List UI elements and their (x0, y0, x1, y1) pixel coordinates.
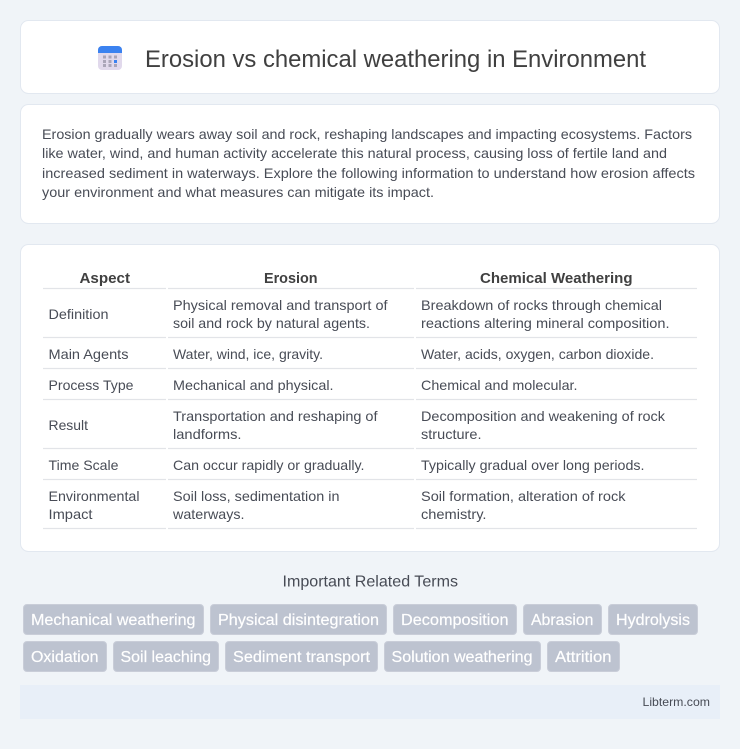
tag: mechanical weathering (24, 604, 204, 634)
table row: environmental impact (43, 488, 697, 528)
table row: environmental impact: Environmental (48, 488, 140, 504)
tag: solution weathering: Solution weathering (392, 649, 532, 666)
table row: result: Transportation and reshaping of (173, 408, 378, 424)
table row: process type: Process Type (48, 377, 134, 393)
tag: hydrolysis: Hydrolysis (616, 612, 690, 629)
table row: time scale: Typically gradual over long periods. (421, 457, 644, 473)
table row: result (43, 408, 697, 448)
tag: sediment transport: Sediment transport (233, 649, 371, 666)
text block: introduction paragraph: your environment and what measures can mitigate its impact. (42, 184, 434, 200)
table row: environmental impact: waterways. (172, 506, 244, 522)
table row: process type: Chemical and molecular. (421, 377, 578, 393)
tag: abrasion (524, 604, 602, 634)
table row: time scale (43, 457, 697, 480)
tag: oxidation: Oxidation (31, 649, 98, 666)
heading: important related terms: Important Related Terms (282, 574, 458, 590)
table header row: Aspect (80, 271, 130, 287)
tag: attrition: Attrition (555, 649, 612, 666)
panel: comparison table (20, 244, 720, 552)
table row: environmental impact: Soil loss, sedimentation in (173, 488, 340, 504)
table header row (43, 271, 697, 288)
tag: hydrolysis (608, 604, 698, 634)
tag: soil leaching (114, 642, 218, 672)
tag: solution weathering (384, 642, 540, 672)
table row: main agents (43, 346, 697, 368)
footer credit: Libterm.com (642, 695, 710, 709)
table row: process type (43, 377, 697, 400)
tag: sediment transport (226, 642, 378, 672)
tag: soil leaching: Soil leaching (120, 649, 211, 666)
table row: time scale: Can occur rapidly or gradually. (173, 457, 364, 473)
table row: result: Result (48, 417, 88, 433)
table row: main agents: Water, wind, ice, gravity. (173, 346, 323, 362)
table row: definition (43, 297, 697, 338)
table row: result: structure. (421, 426, 482, 442)
table header row: Chemical Weathering (480, 271, 632, 287)
tag: physical disintegration (210, 604, 386, 634)
table row: result: Decomposition and weakening of rock (421, 408, 666, 424)
panel: related term tags (24, 604, 698, 672)
tag: decomposition (394, 604, 516, 634)
icon: calendar grid (98, 46, 122, 70)
tag: attrition (548, 642, 620, 672)
table row: definition: soil and rock by natural agents. (173, 315, 370, 331)
table row: main agents: Water, acids, oxygen, carbon dioxide. (421, 346, 654, 362)
table row: definition: Definition (48, 306, 108, 322)
tag: decomposition: Decomposition (401, 612, 508, 629)
footer bar (20, 685, 720, 719)
title: Erosion vs chemical weathering in Environment (145, 46, 646, 73)
tag: oxidation (24, 642, 106, 672)
table row: main agents: Main Agents (48, 346, 128, 362)
table row: process type: Mechanical and physical. (173, 377, 334, 393)
tag: abrasion: Abrasion (531, 612, 594, 629)
table row: environmental impact: Impact (48, 506, 93, 522)
text block: introduction paragraph: increased sediment in waterways. Explore the following information to understand how erosion affects (42, 165, 695, 181)
table header row: Erosion (264, 271, 318, 287)
text block: introduction paragraph (42, 126, 695, 200)
table row: time scale: Time Scale (48, 457, 119, 473)
table row: definition: Physical removal and transport of (173, 297, 388, 313)
tag: physical disintegration: Physical disintegration (218, 612, 379, 629)
table row: result: landforms. (173, 426, 242, 442)
panel: title header (20, 20, 720, 94)
table row: definition: Breakdown of rocks through chemical (421, 297, 662, 313)
table row: definition: reactions altering mineral composition. (421, 315, 670, 331)
text block: introduction paragraph: like water, wind, and human activity accelerate this natural process, causing loss of fertile land and (42, 145, 667, 161)
table row: environmental impact: Soil formation, alteration of rock (421, 488, 627, 504)
table row: environmental impact: chemistry. (421, 506, 486, 522)
tag: mechanical weathering: Mechanical weathering (31, 612, 196, 629)
text block: introduction paragraph: Erosion gradually wears away soil and rock, reshaping landscapes and impacting ecosystems. Factors (42, 126, 692, 142)
panel: introduction (20, 104, 720, 224)
